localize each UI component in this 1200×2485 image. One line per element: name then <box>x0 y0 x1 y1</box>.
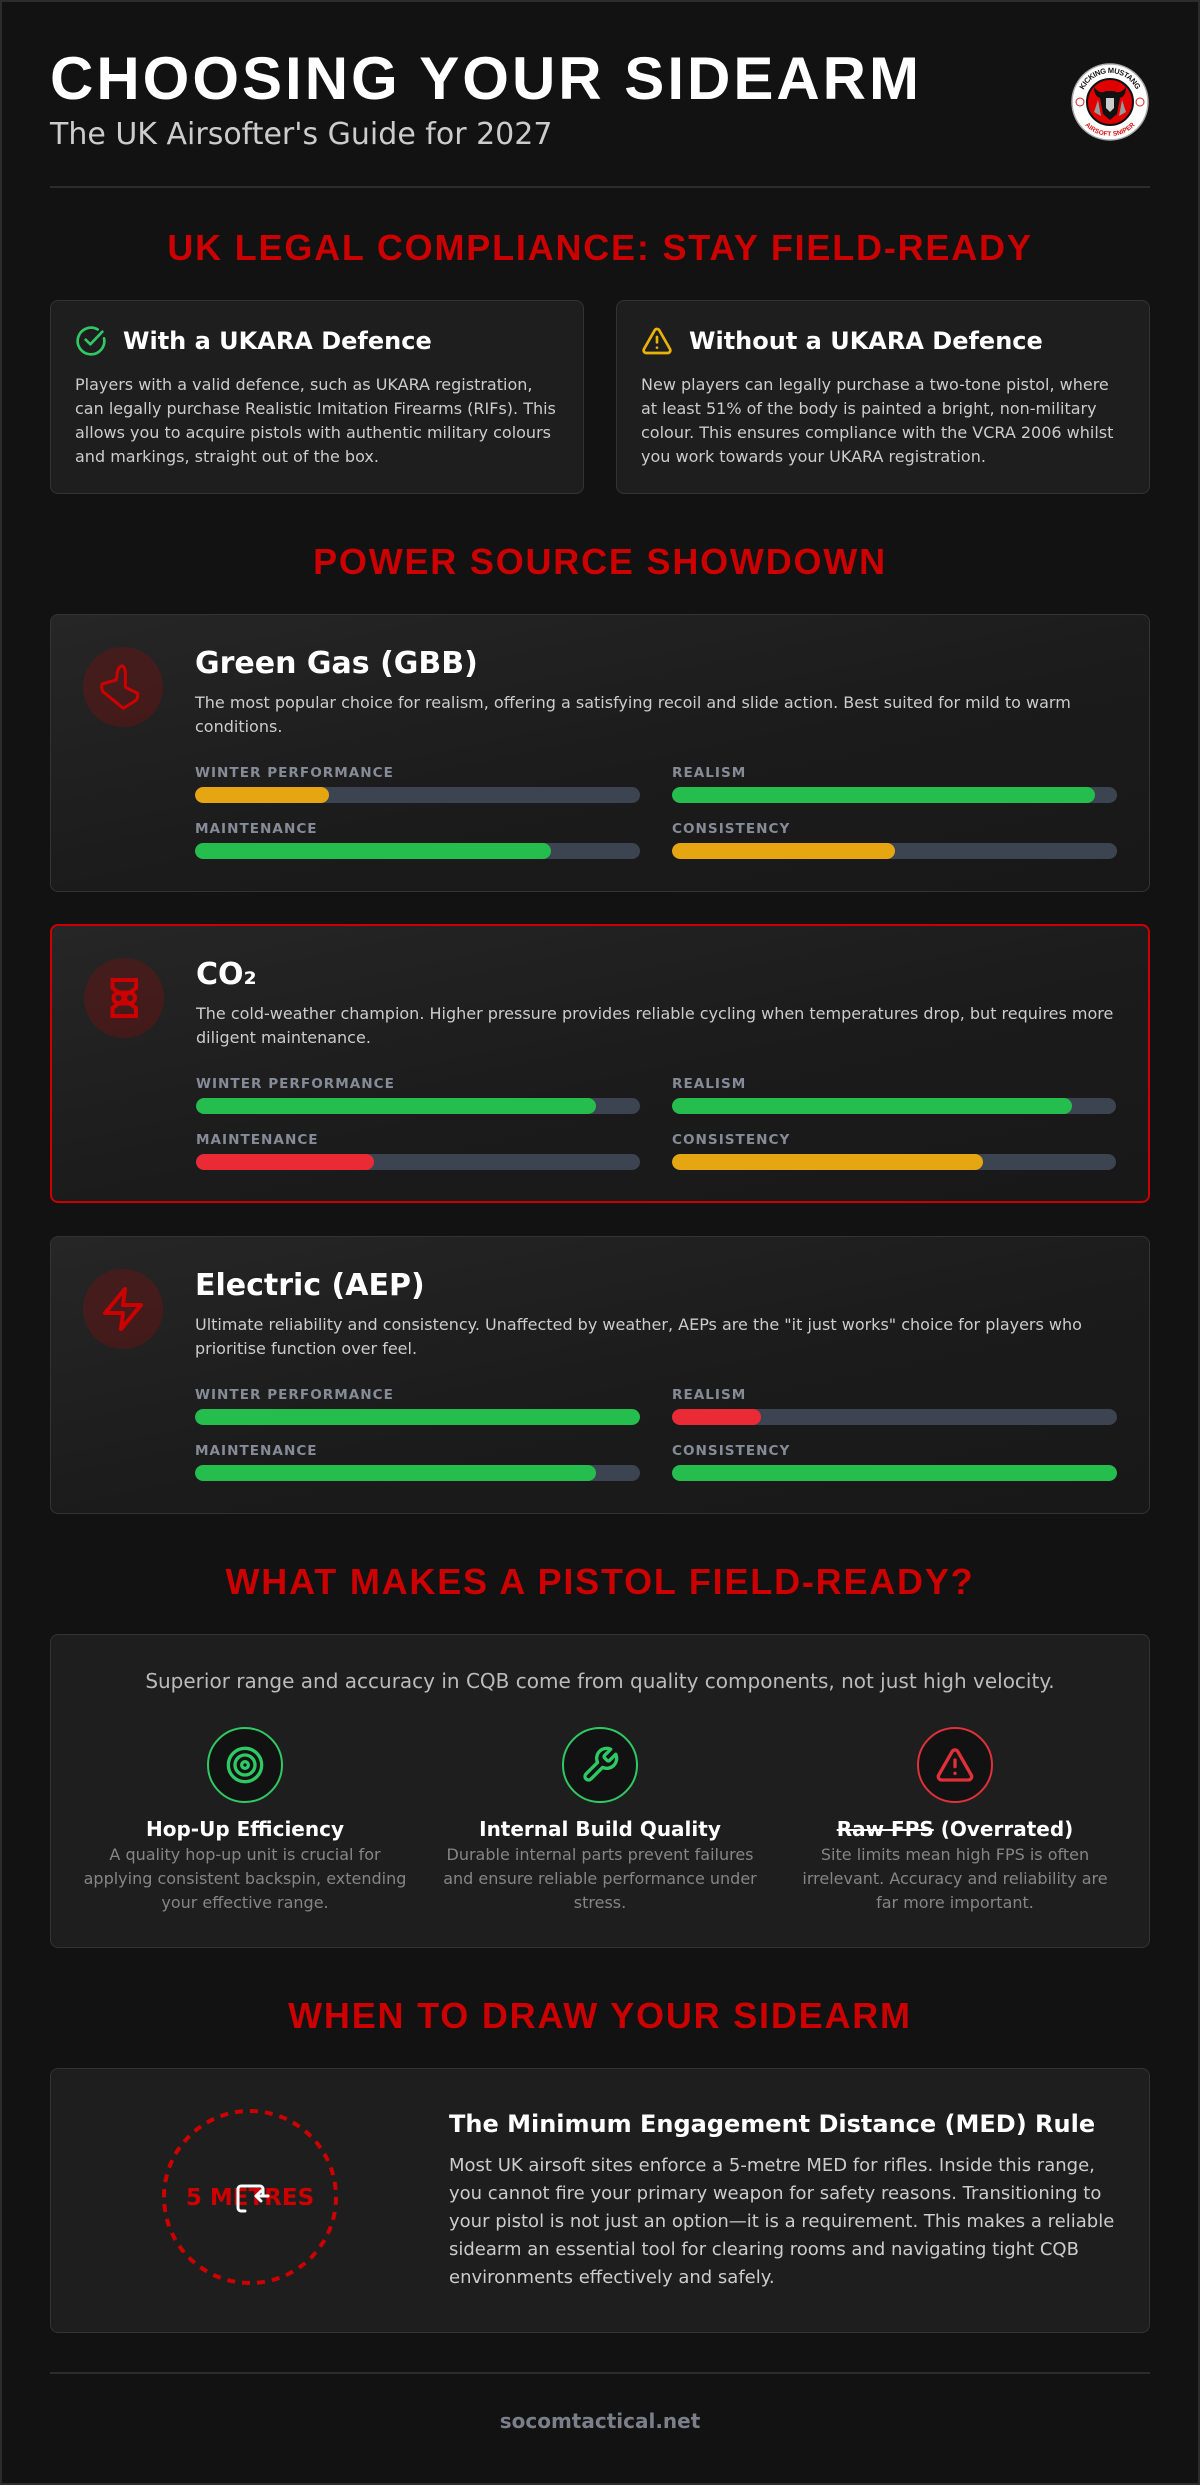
logo badge: AIRSOFT SNIPER <box>1085 122 1135 136</box>
heading: when to draw: WHEN TO DRAW YOUR SIDEARM <box>288 1995 912 2036</box>
heading: power source: POWER SOURCE SHOWDOWN <box>313 541 887 582</box>
heading: legal compliance: UK LEGAL COMPLIANCE: STAY FIELD-READY <box>167 227 1033 268</box>
card text: at least 51% of the body is painted a bright, non-military <box>641 399 1097 418</box>
feature: build quality <box>443 1727 757 1912</box>
title: CHOOSING YOUR SIDEARM <box>50 45 922 112</box>
stat: maintenance: MAINTENANCE <box>196 1132 319 1148</box>
stat: winter performance: WINTER PERFORMANCE <box>195 765 394 781</box>
feature text: A quality hop-up unit is crucial for <box>109 1845 381 1864</box>
power text: conditions. <box>195 717 282 736</box>
heading: field-ready: WHAT MAKES A PISTOL FIELD-READY? <box>226 1561 974 1602</box>
stat: realism: REALISM <box>672 1076 746 1092</box>
feature text: your effective range. <box>161 1893 329 1912</box>
feature text: Site limits mean high FPS is often <box>821 1845 1089 1864</box>
logo badge: KICKING MUSTANG <box>1079 68 1140 90</box>
feature text <box>84 1845 406 1912</box>
stat: maintenance <box>195 821 640 859</box>
MED heading: The Minimum Engagement Distance (MED) Rule <box>449 2110 1095 2138</box>
panel: electric <box>50 1236 1150 1514</box>
stat: winter performance: WINTER PERFORMANCE <box>196 1076 395 1092</box>
icon: canister <box>84 958 164 1038</box>
panel: without a UKARA defence <box>616 300 1150 494</box>
panel: field-ready features <box>50 1634 1150 1948</box>
subtitle: The UK Airsofter's Guide for 2027 <box>50 117 552 152</box>
feature text <box>802 1845 1108 1912</box>
card text: colour. This ensures compliance with the VCRA 2006 whilst <box>641 423 1113 442</box>
feature heading: Raw FPS (Overrated) <box>837 1817 1073 1841</box>
logo badge <box>1071 63 1149 141</box>
power text: diligent maintenance. <box>196 1028 371 1047</box>
feature text: far more important. <box>876 1893 1034 1912</box>
power heading: Green Gas (GBB) <box>195 646 478 681</box>
card text: and markings, straight out of the box. <box>75 447 379 466</box>
MED text <box>449 2155 1114 2288</box>
card heading: Without a UKARA Defence <box>689 327 1043 355</box>
power text: Ultimate reliability and consistency. Unaffected by weather, AEPs are the "it just works" choice for players who <box>195 1315 1082 1334</box>
power text <box>194 693 1071 736</box>
power text: The most popular choice for realism, offering a satisfying recoil and slide action. Best suited for mild to warm <box>195 693 1071 712</box>
icon: warning triangle <box>642 328 672 354</box>
stat: maintenance: MAINTENANCE <box>195 821 318 837</box>
stat: winter performance <box>195 1387 640 1425</box>
card text: Players with a valid defence, such as UKARA registration, <box>75 375 532 394</box>
stat: realism <box>672 765 1117 803</box>
panel: minimum engagement distance <box>50 2068 1150 2333</box>
icon: lightning bolt <box>83 1269 163 1349</box>
stat: consistency: CONSISTENCY <box>672 1443 790 1459</box>
feature text: and ensure reliable performance under <box>443 1869 757 1888</box>
panel: green gas <box>50 614 1150 892</box>
power text <box>196 1004 1113 1047</box>
feature text: Durable internal parts prevent failures <box>446 1845 754 1864</box>
stat: realism: REALISM <box>672 1387 746 1403</box>
feature text: irrelevant. Accuracy and reliability are <box>802 1869 1108 1888</box>
card heading: With a UKARA Defence <box>123 327 432 355</box>
stat: maintenance: MAINTENANCE <box>195 1443 318 1459</box>
MED text: environments effectively and safely. <box>449 2267 775 2288</box>
stat: consistency: CONSISTENCY <box>672 1132 790 1148</box>
feature heading: Hop-Up Efficiency <box>146 1817 344 1841</box>
icon: transition arrow <box>236 2184 270 2212</box>
stat: consistency <box>672 1132 1116 1170</box>
stat: winter performance <box>196 1076 640 1114</box>
feature text <box>443 1845 757 1912</box>
icon: target <box>207 1727 283 1803</box>
footer: socomtactical.net <box>500 2409 700 2433</box>
stat: realism <box>672 1387 1117 1425</box>
icon: wrench <box>562 1727 638 1803</box>
stat: winter performance <box>195 765 640 803</box>
card text: can legally purchase Realistic Imitation Firearms (RIFs). This <box>75 399 556 418</box>
card text: you work towards your UKARA registration. <box>641 447 986 466</box>
icon: pistol <box>83 647 163 727</box>
stat: realism: REALISM <box>672 765 746 781</box>
card text: New players can legally purchase a two-tone pistol, where <box>641 375 1109 394</box>
intro text: Superior range and accuracy in CQB come from quality components, not just high velocity. <box>145 1669 1055 1693</box>
feature text: applying consistent backspin, extending <box>84 1869 406 1888</box>
stat: maintenance <box>195 1443 640 1481</box>
feature heading: Internal Build Quality <box>479 1817 721 1841</box>
diagram: 5 metre circle <box>162 2109 338 2285</box>
stat: consistency: CONSISTENCY <box>672 821 790 837</box>
MED text: Most UK airsoft sites enforce a 5-metre MED for rifles. Inside this range, <box>449 2155 1095 2176</box>
power text: prioritise function over feel. <box>195 1339 417 1358</box>
panel: CO2 <box>50 924 1150 1203</box>
label: 5 metres: 5 METRES <box>186 2185 314 2211</box>
feature: raw FPS <box>802 1727 1108 1912</box>
card text <box>75 375 556 466</box>
MED text: sidearm an essential tool for clearing rooms and navigating tight CQB <box>449 2239 1079 2260</box>
MED text: your pistol is not just an option—it is a requirement. This makes a reliable <box>449 2211 1114 2232</box>
icon: check circle <box>76 326 106 356</box>
feature: hop-up <box>84 1727 406 1912</box>
MED text: you cannot fire your primary weapon for safety reasons. Transitioning to <box>449 2183 1101 2204</box>
panel: with a UKARA defence <box>50 300 584 494</box>
card text: allows you to acquire pistols with authentic military colours <box>75 423 551 442</box>
feature text: stress. <box>574 1893 626 1912</box>
power heading: CO₂ <box>196 957 257 992</box>
power heading: Electric (AEP) <box>195 1268 425 1303</box>
icon: warning <box>917 1727 993 1803</box>
stat: consistency <box>672 821 1117 859</box>
stat: consistency <box>672 1443 1117 1481</box>
power text: The cold-weather champion. Higher pressure provides reliable cycling when temperatures drop, but requires more <box>196 1004 1113 1023</box>
stat: winter performance: WINTER PERFORMANCE <box>195 1387 394 1403</box>
stat: realism <box>672 1076 1116 1114</box>
stat: maintenance <box>196 1132 640 1170</box>
card text <box>641 375 1113 466</box>
power text <box>195 1315 1082 1358</box>
